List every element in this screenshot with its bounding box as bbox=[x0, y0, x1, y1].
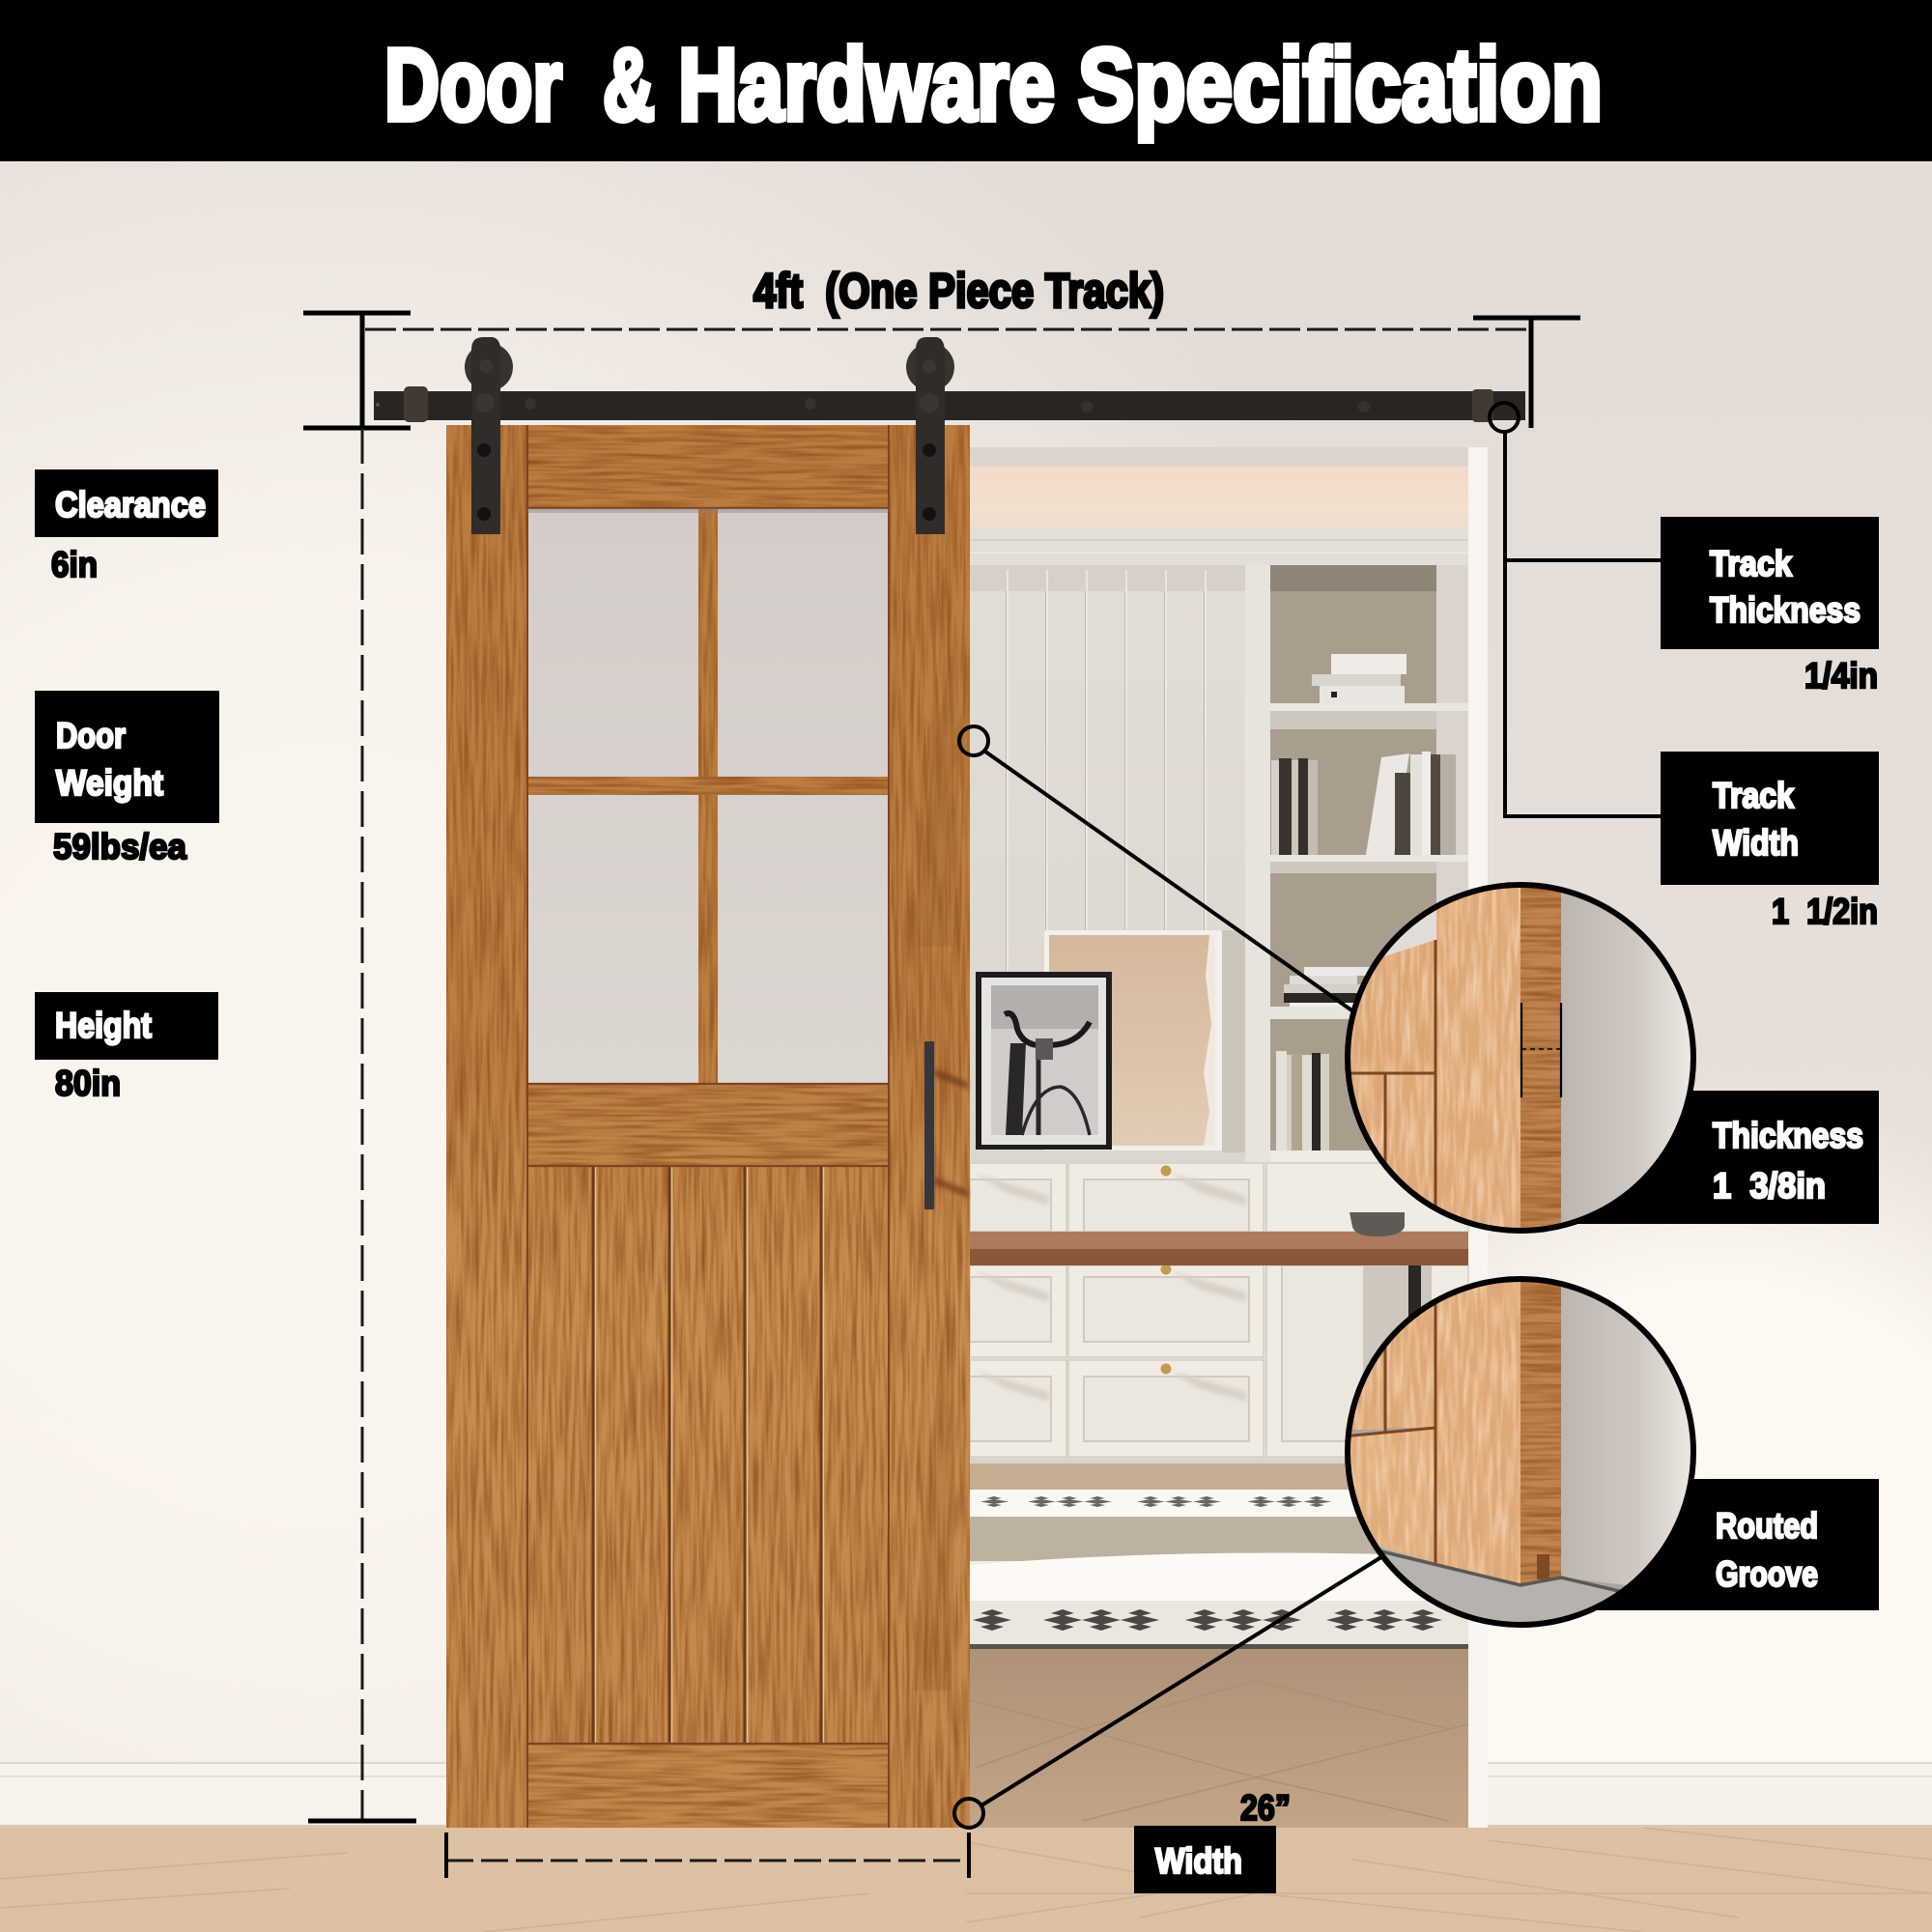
track stops bbox=[404, 386, 1493, 422]
muntins bbox=[527, 508, 889, 1084]
label: width: Width bbox=[1155, 1841, 1242, 1881]
glass panes bbox=[527, 508, 889, 1084]
title: Hardware bbox=[678, 28, 1055, 142]
label: door weight: Weight bbox=[56, 763, 163, 803]
label: track width bbox=[1661, 752, 1879, 931]
height dimension bbox=[308, 428, 416, 1821]
detail circle: thickness bbox=[1343, 879, 1700, 1238]
joint lines bbox=[527, 425, 889, 1828]
herringbone floor bbox=[970, 1649, 1468, 1828]
artwork canvas bbox=[1044, 930, 1222, 1151]
right stile bbox=[889, 425, 970, 1828]
label: door weight bbox=[35, 691, 219, 867]
floor foreground bbox=[0, 1828, 1932, 1932]
detail circle: routed groove bbox=[1343, 1275, 1700, 1633]
label: track thickness bbox=[1661, 517, 1879, 696]
track length dimension bbox=[365, 264, 1580, 428]
label: thickness: 1 3/8in bbox=[1713, 1166, 1826, 1206]
track callout leader lines bbox=[1490, 403, 1662, 816]
label: track thickness: Thickness bbox=[1710, 590, 1861, 630]
label: track width: 1 1/2in bbox=[1772, 892, 1878, 931]
barn door track bbox=[374, 337, 1525, 534]
lock rail bbox=[527, 1084, 889, 1166]
bookcase bbox=[1245, 565, 1468, 1164]
books bbox=[1270, 654, 1456, 1151]
left stile bbox=[446, 425, 527, 1828]
title bbox=[384, 28, 1603, 142]
track length dimension: 4ft (One Piece Track) bbox=[753, 264, 1164, 318]
interior floor bbox=[970, 1463, 1468, 1490]
label: height: Height bbox=[55, 1006, 152, 1045]
label: track thickness: Track bbox=[1710, 544, 1792, 583]
label: routed groove bbox=[1565, 1479, 1879, 1610]
thickness marks bbox=[1521, 1003, 1561, 1097]
label: clearance: 6in bbox=[51, 545, 98, 584]
label: door weight: 59lbs/ea bbox=[53, 827, 186, 867]
title: Specification bbox=[1078, 28, 1603, 142]
desk top and bowl bbox=[970, 1212, 1468, 1323]
bottom rail bbox=[527, 1744, 889, 1828]
label: clearance bbox=[35, 469, 218, 584]
hanger left bbox=[465, 337, 513, 534]
ceiling cove bbox=[970, 467, 1468, 528]
leader: door bottom to groove detail bbox=[954, 1555, 1384, 1828]
crown moulding bbox=[970, 528, 1468, 565]
label: routed groove: Routed bbox=[1716, 1506, 1818, 1546]
leader: door edge to thickness detail bbox=[959, 726, 1357, 1014]
label: track width: Width bbox=[1713, 823, 1799, 863]
label: track width: Track bbox=[1713, 776, 1794, 815]
label: door weight: Door bbox=[56, 716, 126, 755]
label: height bbox=[35, 992, 218, 1103]
title: Door bbox=[384, 28, 562, 142]
track bolts bbox=[525, 398, 1370, 412]
face panels bbox=[1350, 941, 1434, 1072]
label: clearance: Clearance bbox=[55, 485, 206, 525]
room interior through doorway bbox=[970, 447, 1488, 1828]
header bar bbox=[0, 0, 1932, 161]
door handle bbox=[924, 1041, 968, 1209]
planks bbox=[527, 1166, 889, 1744]
door casing bbox=[970, 447, 1488, 1828]
top rail bbox=[527, 425, 889, 508]
label: width bbox=[1134, 1788, 1291, 1893]
clearance dimension bbox=[303, 313, 411, 428]
label: thickness bbox=[1565, 1091, 1879, 1224]
title: & bbox=[603, 28, 655, 142]
face panels bbox=[1352, 1350, 1383, 1430]
label: routed groove: Groove bbox=[1716, 1554, 1818, 1594]
label: width: 26” bbox=[1240, 1788, 1291, 1828]
rug bbox=[970, 1490, 1468, 1649]
label: track thickness: 1/4in bbox=[1804, 656, 1878, 696]
cabinets bbox=[970, 1162, 1468, 1463]
panelled wall bbox=[970, 565, 1250, 1164]
label: height: 80in bbox=[55, 1064, 121, 1103]
hanger right bbox=[906, 337, 954, 534]
sliding door bbox=[446, 425, 970, 1828]
skirting boards bbox=[0, 1762, 1932, 1828]
label: thickness: Thickness bbox=[1713, 1116, 1863, 1155]
framed bicycle photo bbox=[976, 972, 1112, 1150]
width dimension bbox=[446, 1833, 969, 1878]
